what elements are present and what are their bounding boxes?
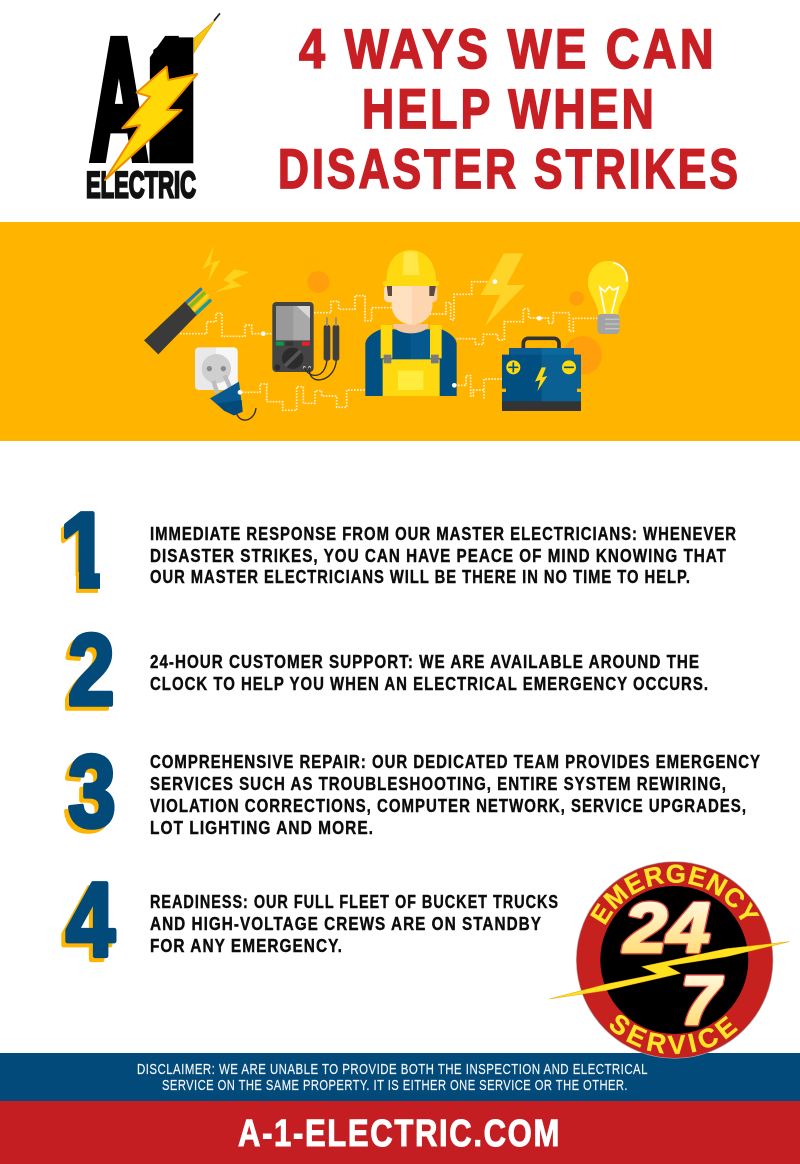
- number 1: 1: [57, 495, 106, 613]
- badge lightning bolt: [549, 942, 789, 999]
- text 2: [150, 652, 709, 694]
- text 2: 24-HOUR CUSTOMER SUPPORT: WE ARE AVAILABLE AROUND THE: [150, 652, 700, 672]
- badge number 24: 24: [622, 888, 710, 967]
- item 2: [64, 613, 709, 730]
- badge word EMERGENCY: EMERGENCY: [590, 864, 760, 925]
- badge number 7: 7: [681, 963, 723, 1039]
- number 3: 3: [64, 739, 112, 852]
- text 4: AND HIGH-VOLTAGE CREWS ARE ON STANDBY: [150, 914, 542, 934]
- badge number 24: 24: [622, 888, 710, 967]
- footer disclaimer bar: SERVICE ON THE SAME PROPERTY. IT IS EITHER ONE SERVICE OR THE OTHER.: [162, 1078, 628, 1094]
- decorative orange dots: [563, 291, 602, 375]
- number 1: [61, 511, 100, 593]
- footer disclaimer bar: DISCLAIMER: WE ARE UNABLE TO PROVIDE BOTH THE INSPECTION AND ELECTRICAL: [137, 1062, 648, 1078]
- text 3: [150, 752, 761, 838]
- title: [278, 17, 741, 200]
- text 1: OUR MASTER ELECTRICIANS WILL BE THERE IN NO TIME TO HELP.: [150, 567, 691, 587]
- badge number 7: 7: [681, 963, 723, 1039]
- item 1: [61, 511, 736, 593]
- logo letters A1: [88, 36, 194, 164]
- circuit traces: [427, 282, 598, 399]
- banner illustration left: cable, meter, socket: [144, 245, 393, 420]
- number 2: 2: [68, 613, 114, 726]
- badge ring: [576, 862, 773, 1058]
- icon: sparks: [202, 245, 249, 292]
- icon: worker: [365, 250, 542, 396]
- footer website bar: [0, 1101, 800, 1164]
- text 1: [150, 524, 737, 587]
- title: HELP WHEN: [362, 77, 657, 140]
- footer website bar: A-1-ELECTRIC.COM: [238, 1113, 561, 1155]
- item 4: [62, 862, 559, 982]
- icon: cable: [144, 289, 210, 354]
- banner illustration right: worker, bolt, battery, bulb: [365, 250, 629, 411]
- title: 4 WAYS WE CAN: [299, 17, 717, 80]
- text 3: LOT LIGHTING AND MORE.: [150, 818, 374, 838]
- banner: [0, 222, 800, 441]
- footer disclaimer bar: [0, 1053, 800, 1101]
- number 4: 4: [66, 862, 115, 978]
- logo: A1 Electric: A1: [91, 5, 191, 193]
- circuit traces: [180, 296, 393, 410]
- logo lightning bolt: [105, 13, 220, 180]
- number 3: 3: [68, 735, 116, 848]
- number 4: 4: [62, 866, 111, 982]
- icon: large lightning bolt: [481, 253, 525, 326]
- icon: light bulb: [588, 261, 629, 334]
- badge: emergency 24/7 service: [549, 861, 790, 1059]
- badge center: [600, 886, 748, 1034]
- text 4: READINESS: OUR FULL FLEET OF BUCKET TRUCKS: [150, 892, 559, 912]
- decorative orange dot: [307, 271, 329, 293]
- icon: wall socket and plug: [195, 347, 256, 420]
- badge word SERVICE: SERVICE: [610, 1014, 738, 1054]
- logo: A1 Electric: [86, 5, 220, 205]
- text 4: [150, 892, 559, 956]
- number 2: 2: [64, 617, 110, 730]
- text 4: FOR ANY EMERGENCY.: [150, 936, 343, 956]
- icon: multimeter: [272, 302, 339, 380]
- icon: car battery: [502, 338, 581, 411]
- item 3: [64, 735, 761, 852]
- logo word ELECTRIC: ELECTRIC: [86, 163, 196, 205]
- number 1: 1: [60, 491, 109, 609]
